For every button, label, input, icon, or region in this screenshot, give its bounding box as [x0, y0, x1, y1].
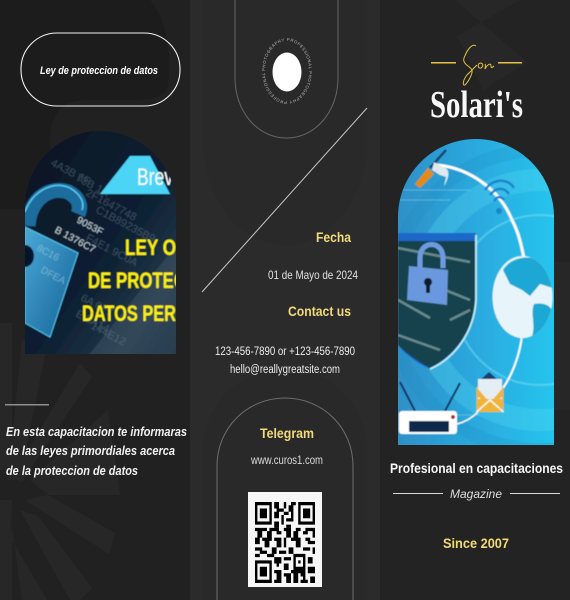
divider — [5, 404, 49, 406]
text: contact details: 123-456-7890 or +123-456-7890 — [215, 346, 355, 358]
outline: bottom arch — [217, 398, 353, 600]
title: solari's: Solari's — [430, 84, 523, 126]
text: description: En esta capacitacion te informaras — [6, 424, 187, 439]
heading: yellow poster text — [82, 238, 176, 322]
pill: title — [21, 33, 180, 106]
outline: top U shape — [235, 0, 338, 138]
qr code — [248, 492, 322, 587]
diagonal line — [202, 108, 367, 292]
icon: padlock: 8C16 — [35, 243, 61, 264]
heading: yellow poster text: DATOS PER — [82, 301, 176, 326]
panel: left — [5, 32, 187, 478]
text: contact details — [215, 346, 355, 376]
icon: envelope — [476, 372, 504, 412]
image: data padlock poster: E 5A14 — [74, 308, 111, 336]
text: magazine with rules: Magazine — [450, 487, 502, 501]
icon: globe — [492, 256, 553, 338]
icon: shield with lock — [398, 233, 476, 371]
icon: router — [399, 382, 460, 434]
heading: fecha: Fecha — [316, 230, 351, 245]
logo: circular badge: PHOTOGRAPHY PROFESSIONAL PHOTOGRAPHY PROFESSIONAL — [262, 38, 312, 104]
icon: wifi — [485, 181, 514, 214]
image: data padlock poster: F4E1 9C0A — [84, 232, 140, 270]
image: data padlock poster: C1B89235B9 — [94, 204, 157, 245]
text: description: de la proteccion de datos — [6, 463, 138, 478]
image: network security illustration — [398, 139, 554, 445]
text: url: www.curos1.com — [250, 453, 323, 467]
image: data padlock poster — [25, 131, 176, 354]
banner: cyan tab: Brev — [137, 164, 173, 191]
logo: son script with rules — [431, 45, 522, 85]
panel: middle — [190, 0, 380, 600]
icon: padlock: DFEA — [39, 265, 68, 287]
connection lines — [437, 165, 524, 258]
banner: cyan tab — [100, 156, 173, 194]
text: date: 01 de Mayo de 2024 — [268, 268, 358, 282]
heading: contact: Contact us — [288, 304, 351, 319]
image: data padlock poster: B 1376C7 — [53, 225, 97, 256]
image: data padlock poster: 144E12 — [89, 320, 128, 348]
heading: yellow poster text: LEY O — [125, 235, 176, 260]
image: data padlock poster: 4A3B 6F — [49, 157, 92, 188]
image: data padlock poster: 6A 0F7 — [79, 292, 115, 319]
heading: telegram: Telegram — [260, 426, 314, 441]
pill: title: Ley de proteccion de datos — [40, 65, 158, 77]
image: data padlock poster: 2F1647748 — [84, 187, 138, 224]
heading: yellow poster text: DE PROTEC — [88, 268, 186, 293]
icon: tools — [415, 150, 448, 188]
text: description: de las leyes primordiales acerca — [6, 443, 175, 458]
text: contact details: hello@reallygreatsite.com — [230, 364, 340, 376]
image: data padlock poster: 73B 1A — [74, 172, 112, 200]
panel: right — [390, 44, 562, 548]
image: data padlock poster: 9053F — [75, 215, 105, 238]
text: since: Since 2007 — [443, 535, 509, 551]
text: description — [6, 424, 187, 478]
icon: padlock — [16, 185, 83, 337]
